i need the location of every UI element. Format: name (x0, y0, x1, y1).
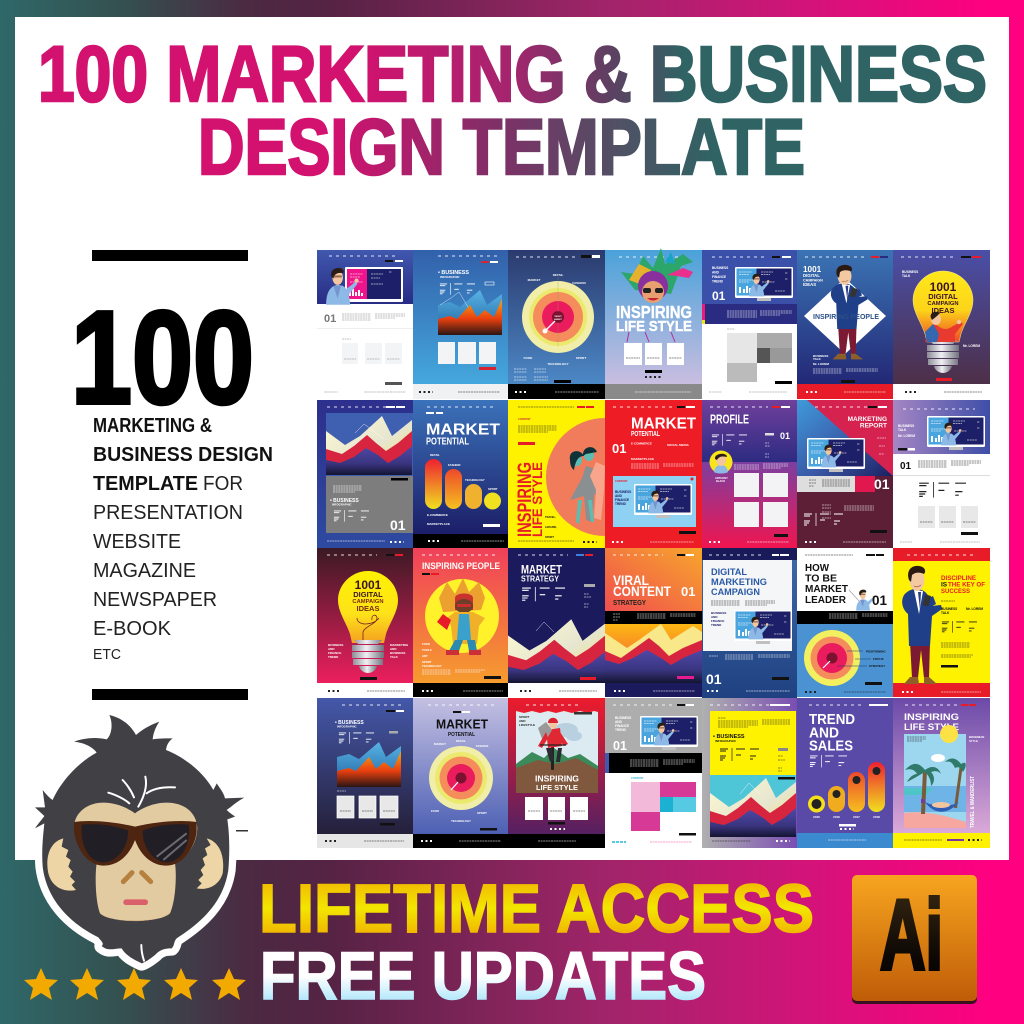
template: inspiring life style yellow: SPORT (545, 535, 554, 539)
template: how to be market leader (797, 548, 893, 697)
mouth (123, 899, 148, 905)
template: market potential target: TECHNOLOGY (451, 819, 471, 823)
left description block: FOR (203, 473, 243, 495)
template: finance monitor page (702, 250, 797, 392)
left description block: BUSINESS DESIGN (93, 444, 273, 466)
template: inspiring people diamond: IDEAS (803, 282, 816, 287)
template: digital marketing campaign: TREND (711, 623, 722, 627)
template: viral content strategy (605, 548, 702, 697)
template: trend and sales (797, 698, 893, 848)
template: market potential target (413, 698, 508, 848)
template: inspiring people cartoon: TOOLS (422, 648, 432, 652)
template: viral content strategy: STRATEGY (613, 598, 646, 607)
template: how to be market leader: 01 (872, 593, 888, 608)
template: profile: 01 (780, 431, 790, 441)
mascot: monkey with sunglasses (35, 715, 244, 963)
template: trend and sales: 2015 (813, 815, 820, 819)
template: inspiring people cartoon: INSPIRING PEOPLE (422, 561, 500, 572)
template: market potential red: CONTENT (615, 479, 628, 483)
title: DESIGN TEMPLATE (198, 102, 805, 191)
template: digital marketing campaign: FINANCE (711, 619, 724, 623)
template: business talk white: Mr. LOREM (898, 434, 915, 438)
template: how to be market leader: POSITIONING (866, 650, 886, 654)
template: cyclist sport and lifestyle: INSPIRING (535, 774, 579, 784)
template: inspiring life style yellow: CONTENT (518, 417, 531, 421)
left description block: MARKETING & (93, 415, 212, 437)
template: yellow bulb maroon: BUSINESS (390, 651, 405, 655)
left description block: NEWSPAPER (93, 589, 217, 611)
template: 1001 bulb blue (893, 250, 990, 392)
template: viral content strategy: 01 (681, 584, 695, 599)
template: blue monitor page (317, 250, 413, 392)
icon: Adobe Illustrator badge: Ai (880, 879, 943, 990)
template: inspiring life style collage: INSPIRING (616, 302, 692, 322)
template: finance monitor page: FINANCE (712, 275, 726, 279)
template: yellow bulb maroon: DIGITAL (353, 590, 383, 599)
left description block: PRESENTATION (93, 502, 243, 524)
template: digital marketing campaign: AND (711, 615, 718, 619)
template: inspiring people cartoon: ART (422, 654, 428, 658)
template: how to be market leader: FOCUS (873, 657, 884, 661)
template: 1001 bulb blue: 1001 (930, 280, 957, 294)
sunglasses (74, 821, 197, 866)
template: target wheel navy: MARKET (528, 278, 541, 282)
template: finance monitor page: BUSINESS (712, 266, 728, 270)
left description block: TEMPLATE (93, 473, 198, 495)
template: 1001 bulb blue: BUSINESS (902, 270, 918, 274)
template: finance monitor page: 01 (712, 289, 726, 303)
template: yellow bulb maroon: CAMPAIGN (352, 599, 384, 605)
template: target wheel navy: FASHION (572, 281, 586, 285)
template: business infographic dark (317, 698, 413, 848)
template: mountain chart gray panel: 01 (390, 517, 406, 533)
template: yellow bulb maroon: BUSINESS (328, 643, 343, 647)
template: discipline is the key (893, 548, 990, 697)
left description block: 100 (71, 284, 254, 431)
template: profile (702, 400, 797, 548)
template: target wheel navy: MARKET (554, 318, 563, 321)
white main panel (15, 17, 1009, 860)
template: market potential red (605, 400, 702, 548)
left description block: E-BOOK (93, 618, 172, 640)
template: yellow bulb maroon: TALK (390, 655, 399, 659)
left description block: ETC (93, 646, 121, 663)
template: market potential target: SPORT (477, 811, 487, 815)
template: market strategy (508, 548, 605, 691)
template: 1001 bulb blue: TALK (902, 274, 911, 278)
template: market potential red: SOCIAL MEDIA (667, 443, 690, 447)
template: inspiring people diamond: CAMPAIGN (803, 278, 823, 282)
template: business infographic blue: • BUSINESS (438, 270, 469, 276)
template: market potential bars: POTENTIAL (426, 436, 469, 448)
template: inspiring people diamond (797, 250, 893, 399)
template: trend and sales: 2018 (873, 815, 880, 819)
template: business talk white (893, 400, 990, 542)
template: 1001 bulb blue: CAMPAIGN (927, 301, 959, 307)
template: how to be market leader: TO BE (805, 572, 837, 584)
template: cyclist sport and lifestyle: SPORT (519, 715, 530, 719)
template: marketing report: MARKETING (848, 416, 887, 423)
template: gray monitor pink blocks: TREND (615, 728, 627, 732)
template: target wheel navy: TARGET (554, 315, 563, 318)
template: finance monitor page: TREND (712, 280, 724, 284)
template: gray monitor pink blocks: FINANCE (615, 724, 629, 728)
rating stars (24, 968, 246, 1000)
template: target wheel navy (508, 250, 605, 399)
template: trend and sales: TREND (809, 712, 855, 728)
template: inspiring life style beach: TRAVEL & WANDERLIST (970, 776, 976, 828)
template: profile: PROFILE (710, 412, 749, 426)
template: business infographic yellow (702, 698, 797, 848)
left description block: MAGAZINE (93, 560, 196, 582)
template: market potential bars: E-COMMERCE (427, 513, 448, 517)
template: 1001 bulb blue: IDEAS (932, 306, 954, 315)
template: inspiring life style yellow: LEISURE, (545, 525, 557, 529)
template: trend and sales: 2017 (853, 815, 860, 819)
template: discipline is the key: Mr. LOREM (966, 607, 983, 611)
template: inspiring people diamond: TALK (813, 357, 822, 361)
template: yellow bulb maroon: AND (390, 647, 397, 651)
bottom banner text: lifetime access: LIFETIME ACCESS (259, 870, 814, 947)
template: profile: ANTHONY (715, 476, 728, 480)
template: market potential red: MARKETPLACE (631, 457, 654, 461)
template: discipline is the key: DISCIPLINE (941, 575, 977, 582)
template: market potential target: FASHION (476, 744, 488, 748)
template: inspiring life style yellow: INSPIRING (515, 462, 536, 537)
template: gray monitor pink blocks: BUSINESS (615, 716, 631, 720)
template: digital marketing campaign: DIGITAL (711, 567, 747, 578)
template: gray monitor pink blocks: CONTENT (631, 776, 644, 780)
template: target wheel navy: SPORT (576, 356, 586, 360)
template: yellow bulb maroon: IDEAS (357, 604, 379, 613)
template: market potential target: FOOD (431, 809, 439, 813)
template: marketing report: REPORT (860, 422, 887, 430)
template: trend and sales: 2016 (833, 815, 840, 819)
template: discipline is the key: SUCCESS (941, 588, 971, 595)
template: market potential target: MARKET (436, 718, 488, 732)
template: inspiring life style beach: LIFE STYLE (904, 722, 959, 733)
template: trend and sales: SALES (809, 738, 853, 754)
template: inspiring people cartoon: TECHNOLOGY (422, 664, 442, 668)
template: mountain chart gray panel: INFOGRAPHIC (332, 502, 352, 506)
template: viral content strategy: CONTENT (613, 583, 671, 599)
template: market potential red: POTENTIAL (631, 431, 661, 438)
template: yellow bulb maroon: MARKETING (390, 643, 409, 647)
template: market potential red: E-COMMERCE (631, 442, 652, 446)
template: business infographic blue: INFOGRAPHIC (440, 275, 460, 279)
template: discipline is the key: IS (941, 582, 948, 588)
template: market potential bars (413, 400, 508, 548)
template: cyclist sport and lifestyle (508, 698, 605, 848)
template: trend and sales: AND (809, 726, 839, 742)
template grid (317, 248, 990, 848)
template: market potential target: POTENTIAL (448, 732, 476, 738)
template: blue monitor page: 01 (324, 313, 336, 325)
template: target wheel navy: RETAIL (553, 273, 563, 277)
template: cyclist sport and lifestyle: AND (519, 719, 526, 723)
template: profile: BLACK (716, 479, 725, 483)
template: inspiring life style yellow (508, 400, 605, 548)
template: gray monitor pink blocks: AND (615, 720, 623, 724)
title (38, 29, 987, 191)
template: business infographic dark: INFOGRAPHIC (337, 724, 357, 728)
template: cyclist sport and lifestyle: LIFESTYLE (519, 723, 535, 727)
head silhouette (35, 715, 244, 963)
template: market potential bars: MARKET (426, 422, 501, 438)
template: market potential bars: SPORT (488, 487, 498, 491)
template: inspiring life style beach: INSPIRING (904, 712, 959, 723)
template: gray monitor pink blocks (605, 698, 702, 842)
template: 1001 bulb blue: DIGITAL (928, 292, 958, 301)
template: digital marketing campaign: BUSINESS (711, 611, 726, 615)
template: yellow bulb maroon: FINANCE (328, 651, 341, 655)
template: yellow bulb maroon: TREND (328, 655, 339, 659)
template: how to be market leader: LEADER (805, 594, 846, 606)
template: digital marketing campaign: 01 (706, 671, 722, 687)
template: market potential red: MARKET (631, 416, 697, 432)
template: market potential bars: FASHION (448, 463, 460, 467)
template: digital marketing campaign: MARKETING (711, 577, 767, 588)
template: marketing report (797, 400, 893, 548)
template: yellow bulb maroon: AND (328, 647, 335, 651)
template: market potential target: RETAIL (456, 739, 466, 743)
left description block: WEBSITE (93, 531, 181, 553)
template: inspiring people diamond: BUSINESS (813, 354, 828, 358)
nose (123, 873, 151, 882)
template: inspiring people cartoon: FOOD (422, 642, 430, 646)
template: how to be market leader: MARKET (805, 583, 849, 595)
face (74, 803, 197, 921)
template: inspiring life style yellow: TRAVEL, (545, 515, 556, 519)
template: how to be market leader: STRATEGY (869, 664, 885, 668)
template: market strategy: MARKET (521, 564, 562, 576)
template: market potential bars: RETAIL (430, 453, 440, 457)
template: market potential red: TREND (615, 502, 627, 506)
template: yellow bulb maroon: 1001 (355, 578, 382, 592)
left description block (71, 250, 273, 832)
template: inspiring life style yellow: LIFE STYLE (529, 462, 545, 537)
template: market potential red: AND (615, 494, 623, 498)
template: discipline is the key: THE KEY OF (948, 582, 985, 588)
template: digital marketing campaign (702, 548, 797, 698)
template: cyclist sport and lifestyle: LIFE STYLE (536, 783, 578, 792)
template: business talk white: BUSINESS (898, 424, 914, 428)
template: discipline is the key: BUSINESS (941, 607, 957, 611)
template: market potential red: FINANCE (615, 498, 629, 502)
template: inspiring people diamond: INSPIRING PEOPLE (813, 312, 879, 321)
template: target wheel navy: TECHNOLOGY (547, 362, 569, 366)
template: market strategy: STRATEGY (521, 574, 559, 584)
template: market potential bars: TECHNOLOGY (465, 478, 485, 482)
template: gray monitor pink blocks: 01 (613, 739, 627, 753)
template: inspiring life style beach (893, 698, 990, 848)
template: inspiring people diamond: DIGITAL (803, 273, 820, 278)
template: inspiring life style collage (605, 248, 702, 399)
template: how to be market leader: HOW (805, 562, 829, 574)
template: business talk white: 01 (900, 461, 912, 472)
template: business talk white: TALK (898, 428, 907, 432)
template: discipline is the key: TALK (941, 611, 950, 615)
template: 1001 bulb blue: Mr. LOREM (963, 344, 980, 348)
ears (47, 838, 223, 891)
template: inspiring life style collage: LIFE STYLE (616, 318, 692, 335)
template: viral content strategy: VIRAL (613, 572, 649, 588)
template: digital marketing campaign: CAMPAIGN (711, 587, 760, 598)
template: mountain chart gray panel: • BUSINESS (330, 498, 359, 504)
template: business infographic dark: • BUSINESS (335, 720, 364, 726)
template: business infographic yellow: INFOGRAPHIC (715, 739, 737, 743)
template: market potential red: BUSINESS (615, 490, 631, 494)
template: market potential red: 01 (612, 441, 626, 456)
template: inspiring life style beach: BOHEMIAN (969, 735, 984, 739)
template: inspiring people cartoon (413, 548, 508, 697)
template: inspiring life style beach: STYLE (969, 739, 978, 743)
template: business infographic blue (413, 250, 509, 399)
template: business infographic yellow: • BUSINESS (713, 734, 745, 740)
template: finance monitor page: AND (712, 270, 720, 274)
template: inspiring people diamond: 1001 (803, 265, 822, 274)
template: inspiring people cartoon: SPORT (422, 660, 432, 664)
template: target wheel navy: FOOD (524, 356, 533, 360)
template: marketing report: 01 (874, 476, 890, 492)
template: yellow bulb maroon (317, 548, 413, 691)
template: mountain chart gray panel (317, 400, 413, 548)
template: market potential bars: MARKETPLACE (427, 522, 450, 526)
icon: Adobe Illustrator badge (852, 875, 977, 1004)
bottom banner text: free updates: FREE UPDATES (260, 938, 706, 1014)
white hair highlights (108, 777, 175, 961)
template: market potential target: MARKET (434, 742, 446, 746)
template: inspiring people diamond: Mr. LOREM (813, 362, 830, 366)
